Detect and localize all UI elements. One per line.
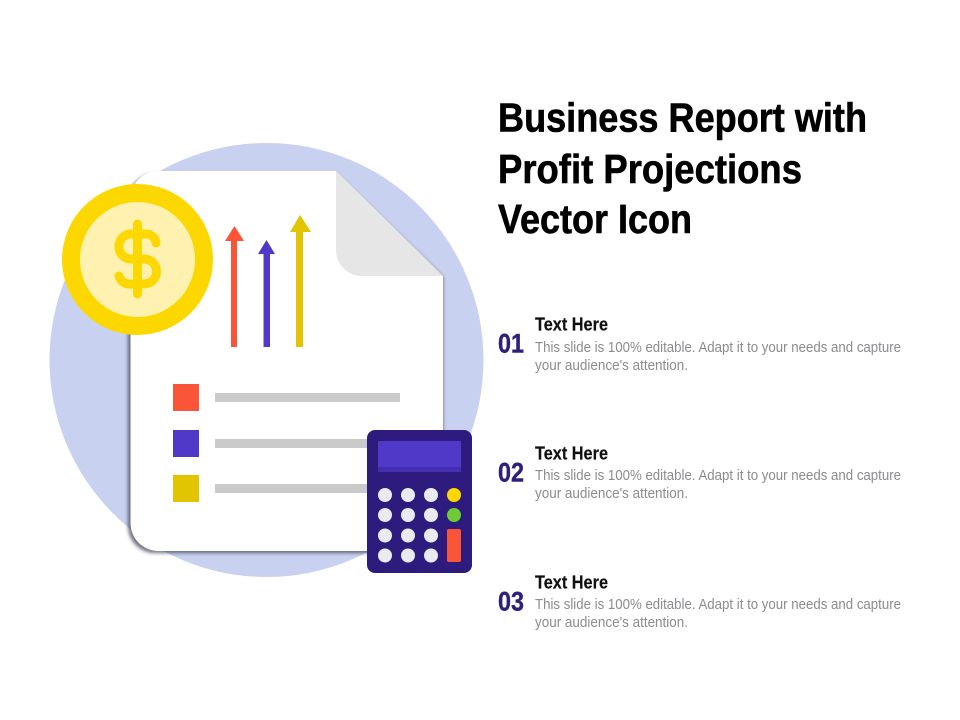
title: Profit Projections [498, 146, 802, 192]
arrow: purple [258, 240, 275, 347]
background circle [50, 143, 484, 577]
legend row 2 [173, 430, 400, 457]
title: Vector Icon [498, 196, 692, 242]
item 01 body [535, 340, 901, 374]
item 03 body: your audience's attention. [535, 615, 688, 631]
item 03 body [535, 597, 901, 631]
calculator screen [378, 441, 461, 472]
calculator body [367, 430, 472, 573]
legend row 1 [173, 384, 400, 411]
item 02 body: This slide is 100% editable. Adapt it to your needs and capture [535, 468, 901, 484]
legend list [173, 384, 400, 502]
item 02 heading: Text Here [535, 444, 608, 464]
icon: calculator [367, 430, 472, 573]
legend row 3 [173, 475, 400, 502]
item 03 body: This slide is 100% editable. Adapt it to your needs and capture [535, 597, 901, 613]
number 02: 02 [498, 458, 524, 488]
item 01 [498, 314, 901, 374]
item 03 heading: Text Here [535, 572, 608, 592]
number 03: 03 [498, 586, 524, 616]
item 01 body: This slide is 100% editable. Adapt it to your needs and capture [535, 340, 901, 356]
item 02 body: your audience's attention. [535, 486, 688, 502]
page fold [336, 171, 443, 276]
item 02 [498, 444, 901, 502]
arrow: red [225, 226, 244, 347]
item 01 heading: Text Here [535, 314, 608, 334]
title: Business Report with [498, 94, 867, 140]
calculator keys [378, 488, 461, 562]
item 03 [498, 572, 901, 631]
item 02 body [535, 468, 901, 502]
document shadow [128, 174, 443, 553]
arrow: yellow [290, 215, 311, 347]
number 01: 01 [498, 328, 524, 358]
document page [130, 171, 443, 551]
title [498, 94, 867, 242]
arrows chart [225, 215, 311, 347]
item 01 body: your audience's attention. [535, 358, 688, 374]
icon: dollar coin [62, 184, 213, 335]
